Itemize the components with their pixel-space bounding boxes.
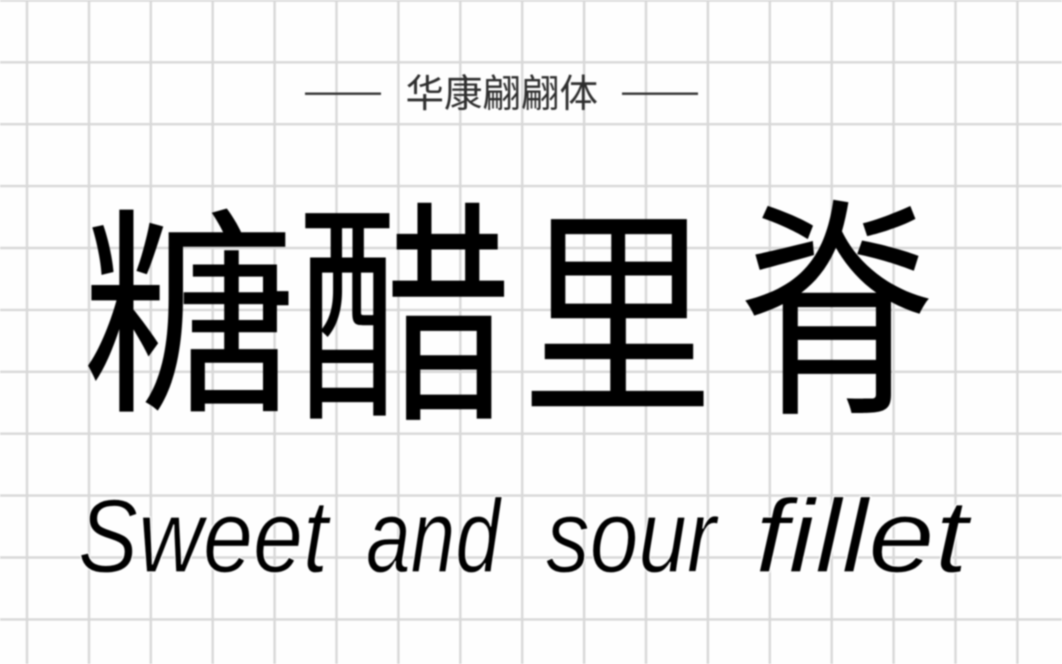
title: Chinese dish name: 醋 [295,188,514,452]
subtitle: English dish name: Sweet [78,479,332,595]
title: Chinese dish name [82,185,934,452]
subtitle: English dish name: fillet [755,479,973,595]
title: Chinese dish name: 里 [521,196,714,442]
subtitle: English dish name [78,479,973,595]
title: Chinese dish name: 糖 [82,196,296,442]
subtitle: typeface name with side rules: 华康翩翩体 [406,73,598,116]
title: Chinese dish name: 脊 [739,185,934,446]
subtitle: English dish name: sour [546,479,720,595]
subtitle: English dish name: and [366,479,502,595]
